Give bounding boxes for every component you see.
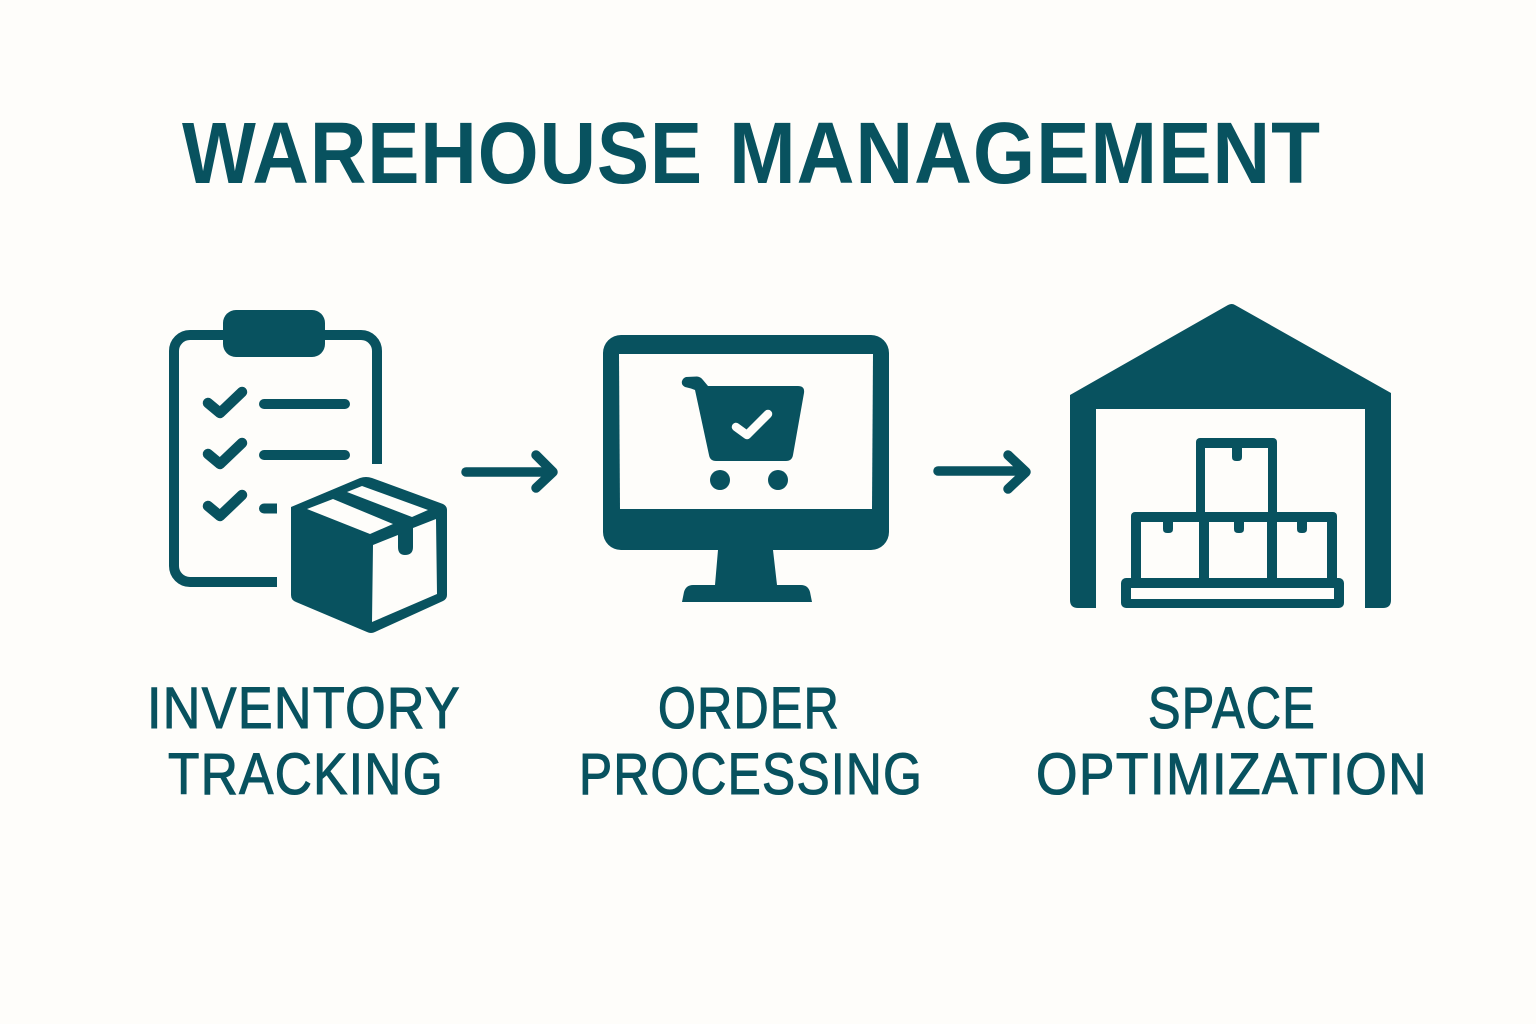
label: order processing: PROCESSING <box>579 742 923 807</box>
label: order processing: ORDER <box>658 676 840 741</box>
arrow: inventory to order <box>466 455 553 488</box>
cart wheels <box>710 470 788 490</box>
package box <box>291 477 447 633</box>
title: MANAGEMENT <box>729 105 1321 202</box>
icon: clipboard with package <box>174 310 447 633</box>
label: inventory tracking: TRACKING <box>168 742 444 807</box>
warehouse building <box>1070 304 1391 608</box>
clipboard clip <box>223 310 325 357</box>
arrow: order to space <box>938 455 1026 489</box>
icon: monitor with shopping cart <box>603 335 889 602</box>
cart check <box>736 414 768 435</box>
checklist <box>208 392 345 516</box>
title <box>182 105 1321 202</box>
clipboard outline <box>174 335 377 582</box>
pallet <box>1121 578 1344 608</box>
stacked boxes <box>1131 438 1337 584</box>
label: inventory tracking: INVENTORY <box>147 676 461 741</box>
title: WAREHOUSE <box>182 105 703 202</box>
label: inventory tracking <box>147 676 461 807</box>
shopping cart <box>682 376 804 461</box>
label: space optimization: SPACE <box>1148 676 1316 741</box>
monitor <box>603 335 889 602</box>
label: space optimization <box>1036 676 1428 807</box>
icon: warehouse with boxes <box>1070 304 1391 608</box>
screen <box>619 354 873 509</box>
label: order processing <box>579 676 923 807</box>
label: space optimization: OPTIMIZATION <box>1036 742 1428 807</box>
